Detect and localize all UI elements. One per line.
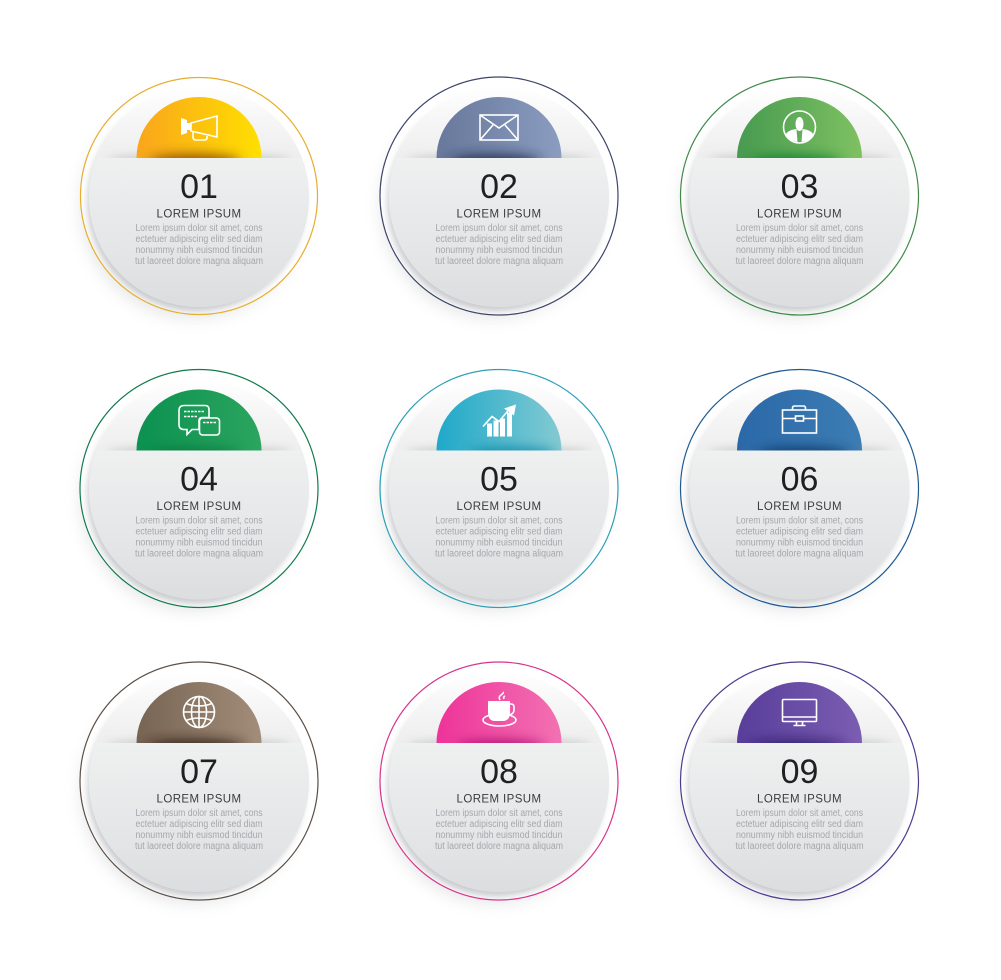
- text block 06: [736, 516, 864, 560]
- text block 08: tut laoreet dolore magna aliquam: [435, 841, 563, 852]
- number 01: 01: [180, 168, 218, 206]
- text block 07: nonummy nibh euismod tincidun: [135, 830, 263, 841]
- icon: businessman: [784, 111, 816, 143]
- number 04: 04: [180, 460, 218, 498]
- text block 09: nonummy nibh euismod tincidun: [736, 830, 863, 841]
- text block 07: [135, 808, 263, 852]
- text block 07: Lorem ipsum dolor sit amet, cons: [135, 808, 263, 819]
- text block 09: [736, 808, 864, 852]
- text block 03: Lorem ipsum dolor sit amet, cons: [736, 223, 863, 234]
- heading 05: LOREM IPSUM: [457, 501, 541, 513]
- icon: megaphone: [181, 116, 217, 140]
- number 03: 03: [781, 168, 818, 206]
- text block 09: Lorem ipsum dolor sit amet, cons: [736, 808, 863, 819]
- dome 07: [136, 682, 262, 743]
- text block 02: nonummy nibh euismod tincidun: [435, 245, 563, 256]
- ring 01: [80, 78, 318, 314]
- text block 03: tut laoreet dolore magna aliquam: [736, 256, 864, 267]
- text block 08: Lorem ipsum dolor sit amet, cons: [435, 808, 563, 819]
- text block 08: [435, 808, 563, 852]
- icon: coffee cup: [483, 692, 516, 726]
- card 03: [680, 77, 918, 318]
- heading 01: LOREM IPSUM: [157, 208, 241, 220]
- ring 05: [380, 370, 618, 608]
- text block 01: tut laoreet dolore magna aliquam: [135, 256, 263, 267]
- dome 01: [136, 97, 262, 158]
- dome 08: [436, 682, 562, 743]
- text block 06: Lorem ipsum dolor sit amet, cons: [736, 516, 863, 526]
- card 05: [380, 370, 618, 610]
- text block 07: ectetuer adipiscing elitr sed diam: [136, 819, 262, 830]
- number 02: 02: [480, 168, 518, 206]
- text block 04: Lorem ipsum dolor sit amet, cons: [135, 516, 263, 526]
- text block 02: ectetuer adipiscing elitr sed diam: [436, 234, 562, 245]
- ring 08: [380, 662, 618, 900]
- card 01: [80, 78, 318, 318]
- icon: chat bubbles: [179, 406, 220, 435]
- text block 02: tut laoreet dolore magna aliquam: [435, 256, 563, 267]
- card 09: [680, 662, 918, 903]
- number 06: 06: [781, 460, 818, 498]
- ring 04: [80, 370, 318, 608]
- heading 04: LOREM IPSUM: [157, 501, 241, 513]
- heading 09: LOREM IPSUM: [757, 794, 842, 806]
- icon: monitor: [782, 700, 816, 726]
- text block 06: ectetuer adipiscing elitr sed diam: [736, 526, 863, 538]
- text block 01: Lorem ipsum dolor sit amet, cons: [135, 223, 263, 234]
- text block 04: [135, 516, 263, 560]
- text block 06: tut laoreet dolore magna aliquam: [736, 548, 864, 560]
- ring 07: [80, 662, 318, 900]
- dome 09: [737, 682, 862, 743]
- number 09: 09: [781, 753, 818, 791]
- dome 06: [737, 390, 862, 450]
- text block 05: [435, 516, 563, 560]
- text block 01: [135, 223, 263, 267]
- heading 06: LOREM IPSUM: [757, 501, 842, 513]
- icon: envelope: [480, 115, 518, 140]
- text block 03: [736, 223, 864, 267]
- text block 04: nonummy nibh euismod tincidun: [135, 538, 263, 548]
- heading 03: LOREM IPSUM: [757, 208, 842, 220]
- ring 02: [380, 77, 618, 315]
- card 07: [80, 662, 318, 903]
- dome 05: [436, 390, 562, 450]
- text block 02: [435, 223, 563, 267]
- number 05: 05: [480, 460, 518, 498]
- heading 08: LOREM IPSUM: [457, 794, 541, 806]
- number 07: 07: [180, 753, 218, 791]
- text block 04: ectetuer adipiscing elitr sed diam: [136, 526, 262, 538]
- text block 05: tut laoreet dolore magna aliquam: [435, 548, 563, 560]
- text block 05: ectetuer adipiscing elitr sed diam: [436, 526, 562, 538]
- ring 06: [680, 370, 918, 608]
- ring 09: [680, 662, 918, 900]
- text block 09: ectetuer adipiscing elitr sed diam: [736, 819, 863, 830]
- text block 05: Lorem ipsum dolor sit amet, cons: [435, 516, 563, 526]
- icon: briefcase: [782, 406, 816, 433]
- text block 02: Lorem ipsum dolor sit amet, cons: [435, 223, 563, 234]
- text block 07: tut laoreet dolore magna aliquam: [135, 841, 263, 852]
- card 08: [380, 662, 618, 903]
- heading 07: LOREM IPSUM: [157, 794, 241, 806]
- icon: globe: [184, 696, 214, 728]
- text block 03: ectetuer adipiscing elitr sed diam: [736, 234, 863, 245]
- text block 08: ectetuer adipiscing elitr sed diam: [436, 819, 562, 830]
- text block 09: tut laoreet dolore magna aliquam: [736, 841, 864, 852]
- heading 02: LOREM IPSUM: [457, 208, 541, 220]
- ring 03: [680, 77, 918, 315]
- text block 04: tut laoreet dolore magna aliquam: [135, 548, 263, 560]
- text block 08: nonummy nibh euismod tincidun: [435, 830, 563, 841]
- dome 02: [436, 97, 562, 158]
- card 04: [80, 370, 318, 610]
- text block 01: ectetuer adipiscing elitr sed diam: [136, 234, 262, 245]
- number 08: 08: [480, 753, 518, 791]
- text block 01: nonummy nibh euismod tincidun: [135, 245, 263, 256]
- dome 04: [136, 390, 262, 450]
- text block 05: nonummy nibh euismod tincidun: [435, 538, 563, 548]
- card 02: [380, 77, 618, 318]
- icon: growth chart: [483, 404, 516, 436]
- text block 03: nonummy nibh euismod tincidun: [736, 245, 863, 256]
- text block 06: nonummy nibh euismod tincidun: [736, 538, 863, 548]
- card 06: [680, 370, 918, 610]
- dome 03: [737, 97, 862, 158]
